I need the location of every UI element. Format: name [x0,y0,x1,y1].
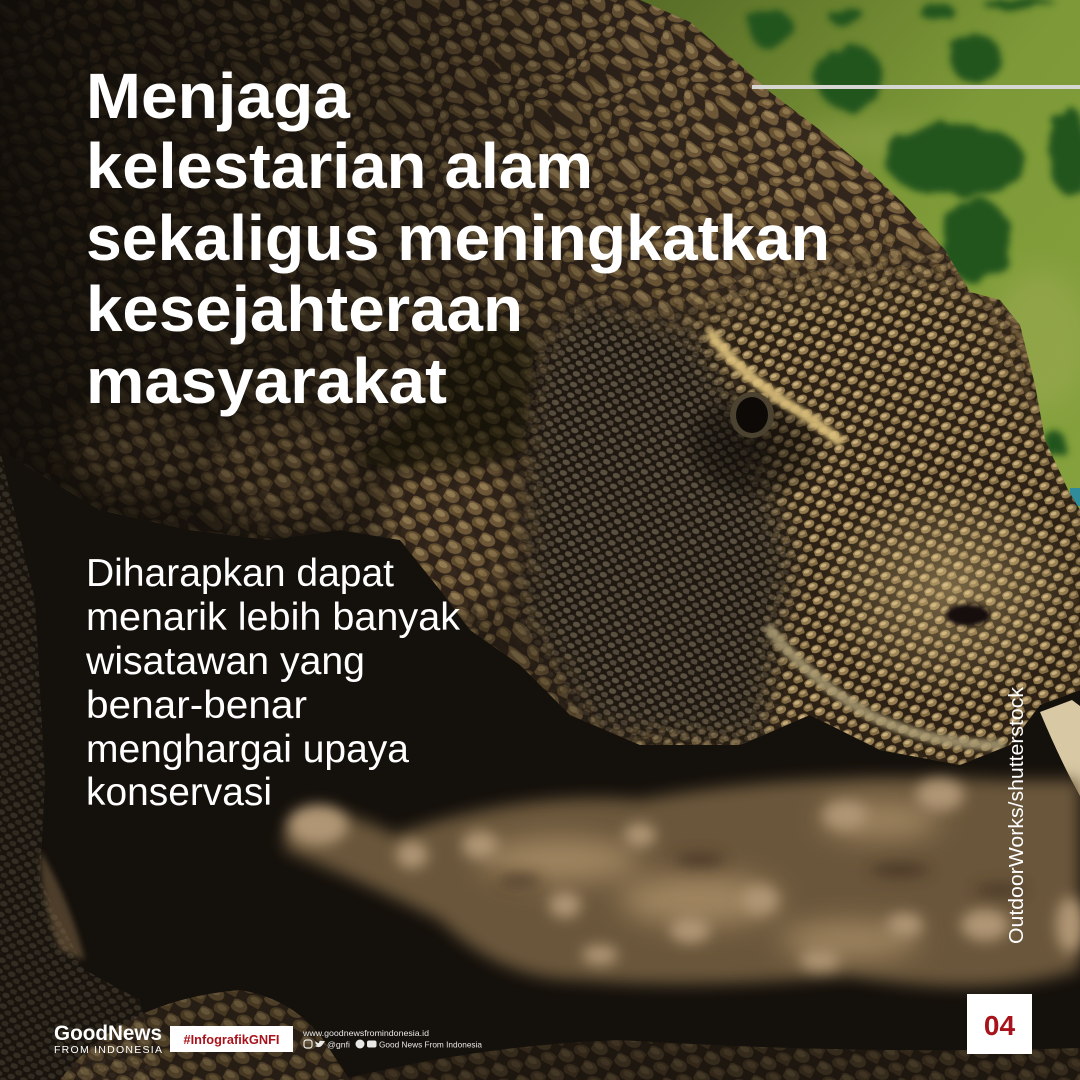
title: kelestarian alam [86,130,593,202]
blurred foreground lizard [285,778,1080,986]
hashtag badge [170,1026,293,1052]
shadow behind neck [350,300,535,470]
icon: youtube [367,1040,376,1048]
bright blurred scales [288,779,1080,970]
body text: wisatawan yang [85,640,365,683]
brow ridge [712,335,838,440]
GoodNews logo [54,1022,162,1056]
hashtag badge: #InfografikGNFI [184,1032,280,1047]
body text: menghargai upaya [86,728,409,771]
foreground paw and ground [40,850,1080,1080]
title: kesejahteraan [86,273,523,345]
contact info: www.goodnewsfromindonesia.id [302,1028,429,1038]
shoulder and leg scales [64,400,530,630]
jaw and cheek dark scales [512,290,810,745]
eye [730,392,774,438]
GoodNews logo: GoodNews [54,1022,162,1045]
body text: menarik lebih banyak [86,596,460,639]
title [86,60,830,417]
nostril [946,604,990,626]
body text [85,552,460,814]
komodo dragon body and head [0,0,1080,800]
contact info [302,1028,482,1050]
left fade over body [0,0,722,745]
lower lip [770,630,1000,745]
body text: Diharapkan dapat [86,552,394,595]
body text: konservasi [86,771,272,814]
photo credit: OutdoorWorks/shutterstock [1006,686,1028,944]
tongue tip [1040,700,1080,796]
snout highlight [834,492,1066,688]
title: Menjaga [86,60,350,132]
back of dragon's left leg [0,450,160,1080]
page number [967,994,1032,1054]
GoodNews logo: FROM INDONESIA [54,1044,162,1056]
site name: Good News From Indonesia [379,1040,482,1050]
icon: facebook [356,1040,364,1048]
title: masyarakat [86,345,447,417]
eye surround shade [687,388,827,500]
decorative line top right [752,85,1080,89]
page number: 04 [984,1010,1015,1041]
icon: instagram [304,1040,312,1048]
icon: twitter [315,1041,325,1047]
head scale texture [619,241,1080,765]
body text: benar-benar [86,684,307,727]
title: sekaligus meningkatkan [86,202,830,274]
social handle: @gnfi [327,1040,350,1050]
landscape: green hillside with trees [620,0,1080,520]
